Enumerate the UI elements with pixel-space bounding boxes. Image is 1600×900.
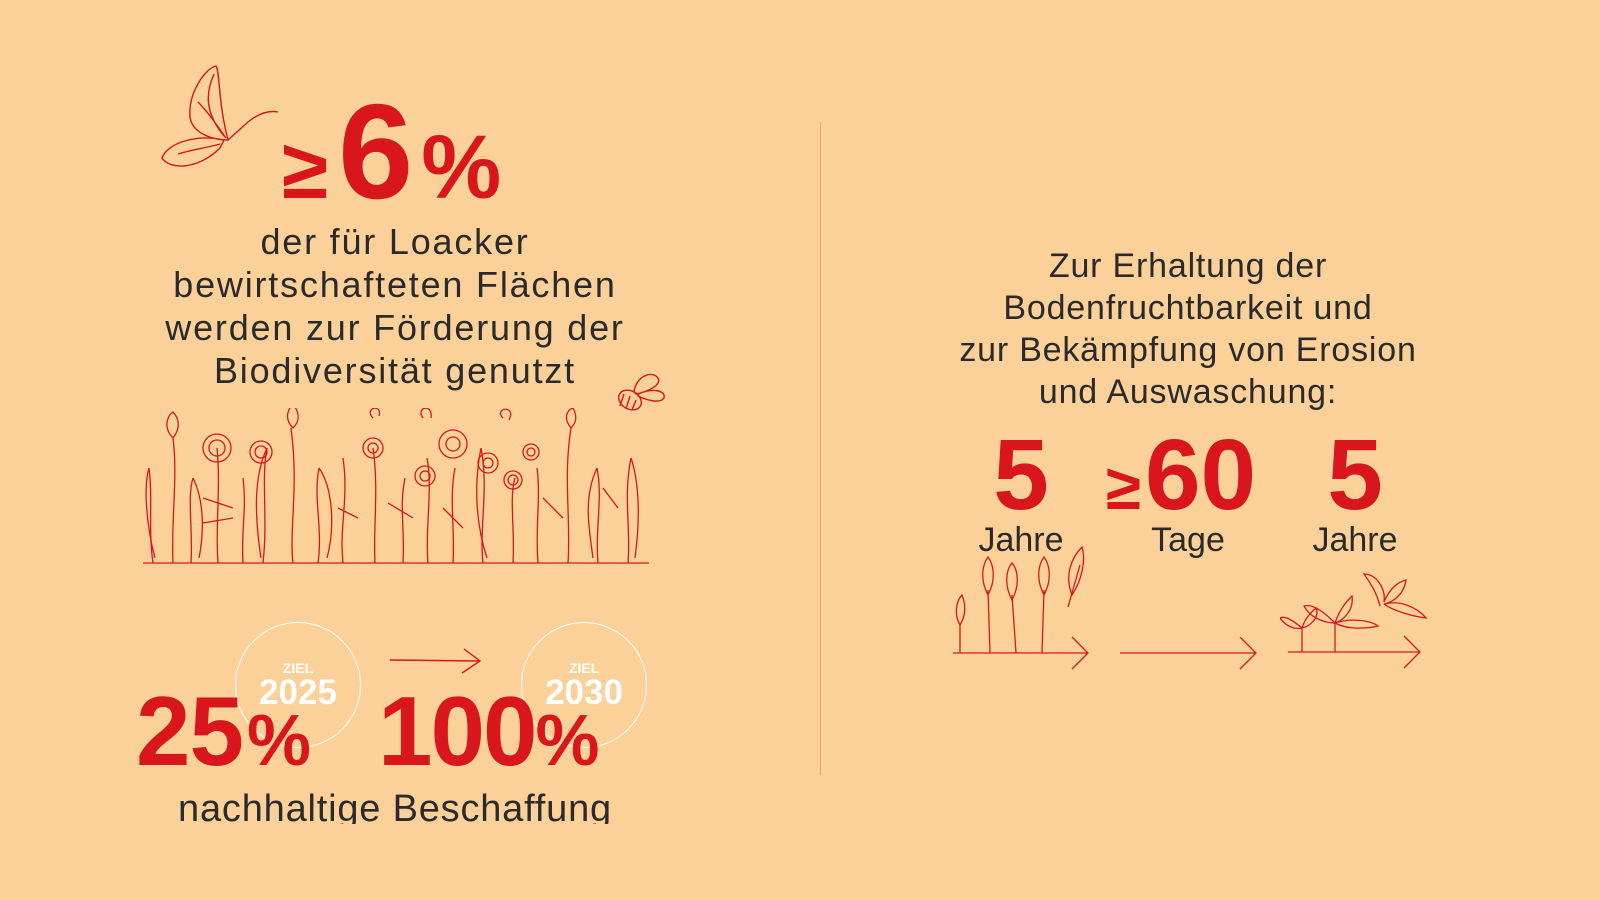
stat: 5 Jahre (2): 5 [1327,419,1383,531]
text block: biodiversity: der für Loacker [260,221,530,262]
text block: soil fertility: Zur Erhaltung der [1049,247,1327,285]
stat: ≥60 Tage: Tage [1151,521,1225,559]
divider [820,122,821,775]
stat: 5 Jahre (2): Jahre [1312,521,1398,559]
stat: 100%: 100% [378,676,598,786]
circle: Ziel 2025: 2025 [259,673,337,712]
stat: 5 Jahre (2) [1312,419,1398,559]
circle: Ziel 2030 [521,622,647,748]
icon: butterfly [161,65,278,167]
heading: ≥6%: ≥6% [282,76,501,227]
icon: bee [618,374,665,410]
text block: soil fertility: zur Bekämpfung von Erosion [959,331,1417,369]
text block: soil fertility [959,247,1417,411]
text block: soil fertility: Bodenfruchtbarkeit und [1003,289,1373,327]
meadow illustration [143,408,649,564]
text block: biodiversity: werden zur Förderung der [165,307,625,348]
text block: biodiversity [165,221,625,391]
circle: Ziel 2030: 2030 [545,673,623,712]
text block: soil fertility: und Auswaschung: [1039,373,1337,411]
circle: Ziel 2030: ZIEL [569,660,599,676]
stat: 5 Jahre [978,419,1064,559]
text block: biodiversity: Biodiversität genutzt [214,350,576,391]
stat: 5 Jahre: 5 [993,419,1049,531]
stat: ≥60 Tage: ≥60 [1106,419,1256,531]
circle: Ziel 2025 [235,622,361,748]
circle: Ziel 2025: ZIEL [283,660,313,676]
icon: seedlings with arrow [1280,573,1428,668]
arrow: middle [1120,637,1257,670]
text block: biodiversity: bewirtschafteten Flächen [173,264,617,305]
stat: 5 Jahre: Jahre [978,521,1064,559]
icon: wheat with arrow [953,546,1089,670]
stat: 25%: 25% [136,676,310,786]
arrow: 2025 to 2030 [390,648,482,674]
